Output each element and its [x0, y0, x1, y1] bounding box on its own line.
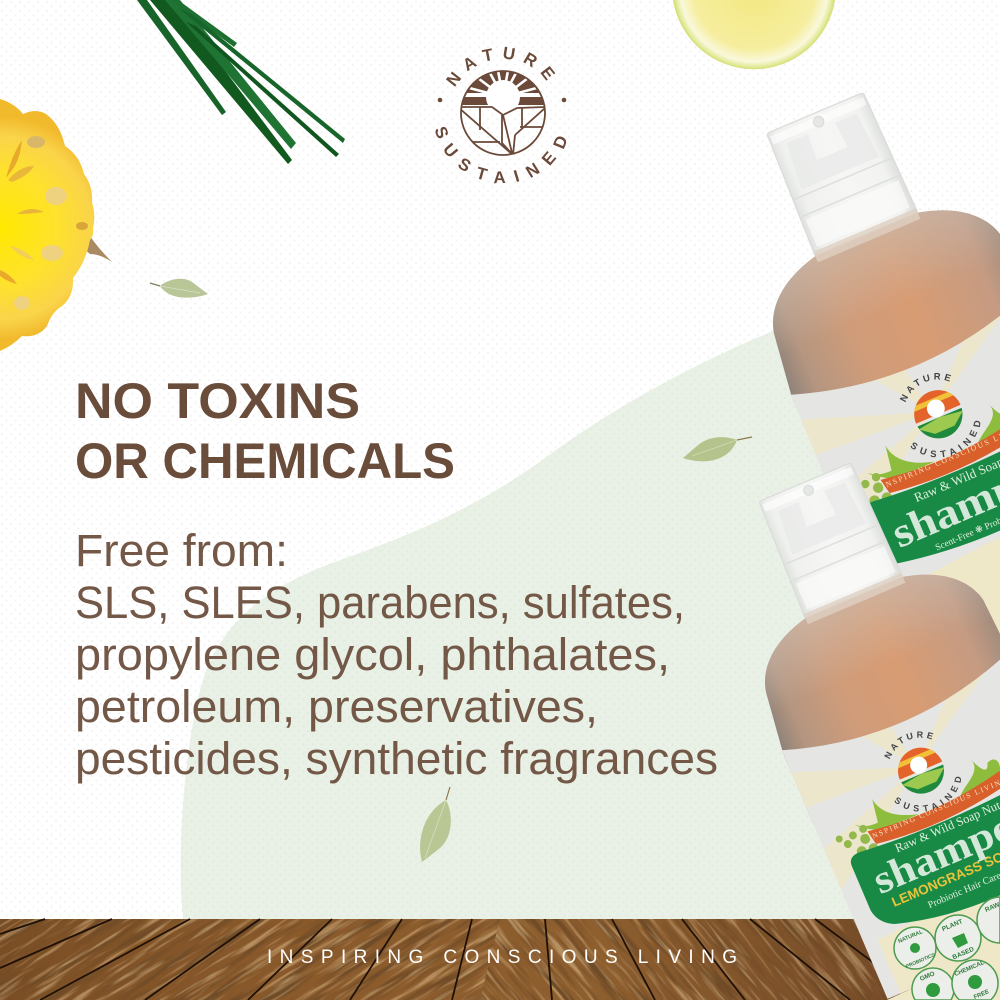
- front bottle body and label: [759, 463, 1000, 999]
- back bottle logo: NATURE: [900, 373, 952, 402]
- badge: natural probiotics: PROBIOTICS: [905, 952, 937, 970]
- front bottle body and label: Raw & Wild Soap Nut: [893, 798, 1000, 855]
- badge: chemical free: CHEMICAL: [954, 960, 986, 978]
- free-from text block: Free from:: [75, 525, 288, 576]
- leaf center right: [683, 437, 752, 461]
- wooden floor: [0, 919, 1000, 1000]
- pineapple slice: [0, 99, 112, 351]
- badge: chemical free: [952, 960, 998, 1000]
- tagline: INSPIRING CONSCIOUS LIVING: [267, 947, 737, 968]
- badge: natural probiotics: [894, 927, 937, 970]
- badge: GMO free: GMO: [919, 970, 936, 983]
- pale green blob: [181, 300, 1000, 919]
- free-from text block: [75, 525, 718, 784]
- badge: natural probiotics: NATURAL: [897, 929, 924, 945]
- lemongrass stalks: [137, 0, 345, 164]
- back shampoo bottle: [766, 92, 1000, 634]
- back bottle logo: SUSTAINED: [910, 420, 980, 458]
- logo: Nature Sustained: [436, 46, 566, 184]
- front bottle cap: [756, 461, 905, 624]
- badge: plant based: PLANT: [941, 918, 964, 933]
- free-from text block: propylene glycol, phthalates,: [75, 629, 670, 680]
- back bottle cap: [764, 91, 920, 262]
- badge: GMO free: [912, 968, 954, 1000]
- front shampoo bottle: [759, 463, 1000, 1000]
- leaf bottom: [420, 787, 451, 862]
- front bottle logo: [884, 732, 961, 812]
- free-from text block: SLS, SLES, parabens, sulfates,: [75, 577, 685, 628]
- heading: NO TOXINS: [75, 373, 360, 429]
- front bottle logo: SUSTAINED: [894, 776, 961, 812]
- heading: [75, 373, 455, 489]
- lower label corner: [887, 948, 1000, 1000]
- heading: OR CHEMICALS: [75, 433, 455, 489]
- free-from text block: pesticides, synthetic fragrances: [75, 733, 718, 784]
- back bottle logo: [900, 373, 980, 458]
- badge: plant based: [935, 915, 981, 961]
- free-from text block: petroleum, preservatives,: [75, 681, 598, 732]
- lemon slice: [673, 0, 835, 69]
- logo: Nature Sustained: NATURE: [446, 46, 556, 87]
- front bottle logo: NATURE: [884, 732, 934, 759]
- badge: raw: [977, 897, 1000, 943]
- badge: plant based: BASED: [952, 946, 976, 961]
- logo: Nature Sustained: SUSTAINED: [436, 126, 566, 184]
- leaf left: [150, 279, 208, 298]
